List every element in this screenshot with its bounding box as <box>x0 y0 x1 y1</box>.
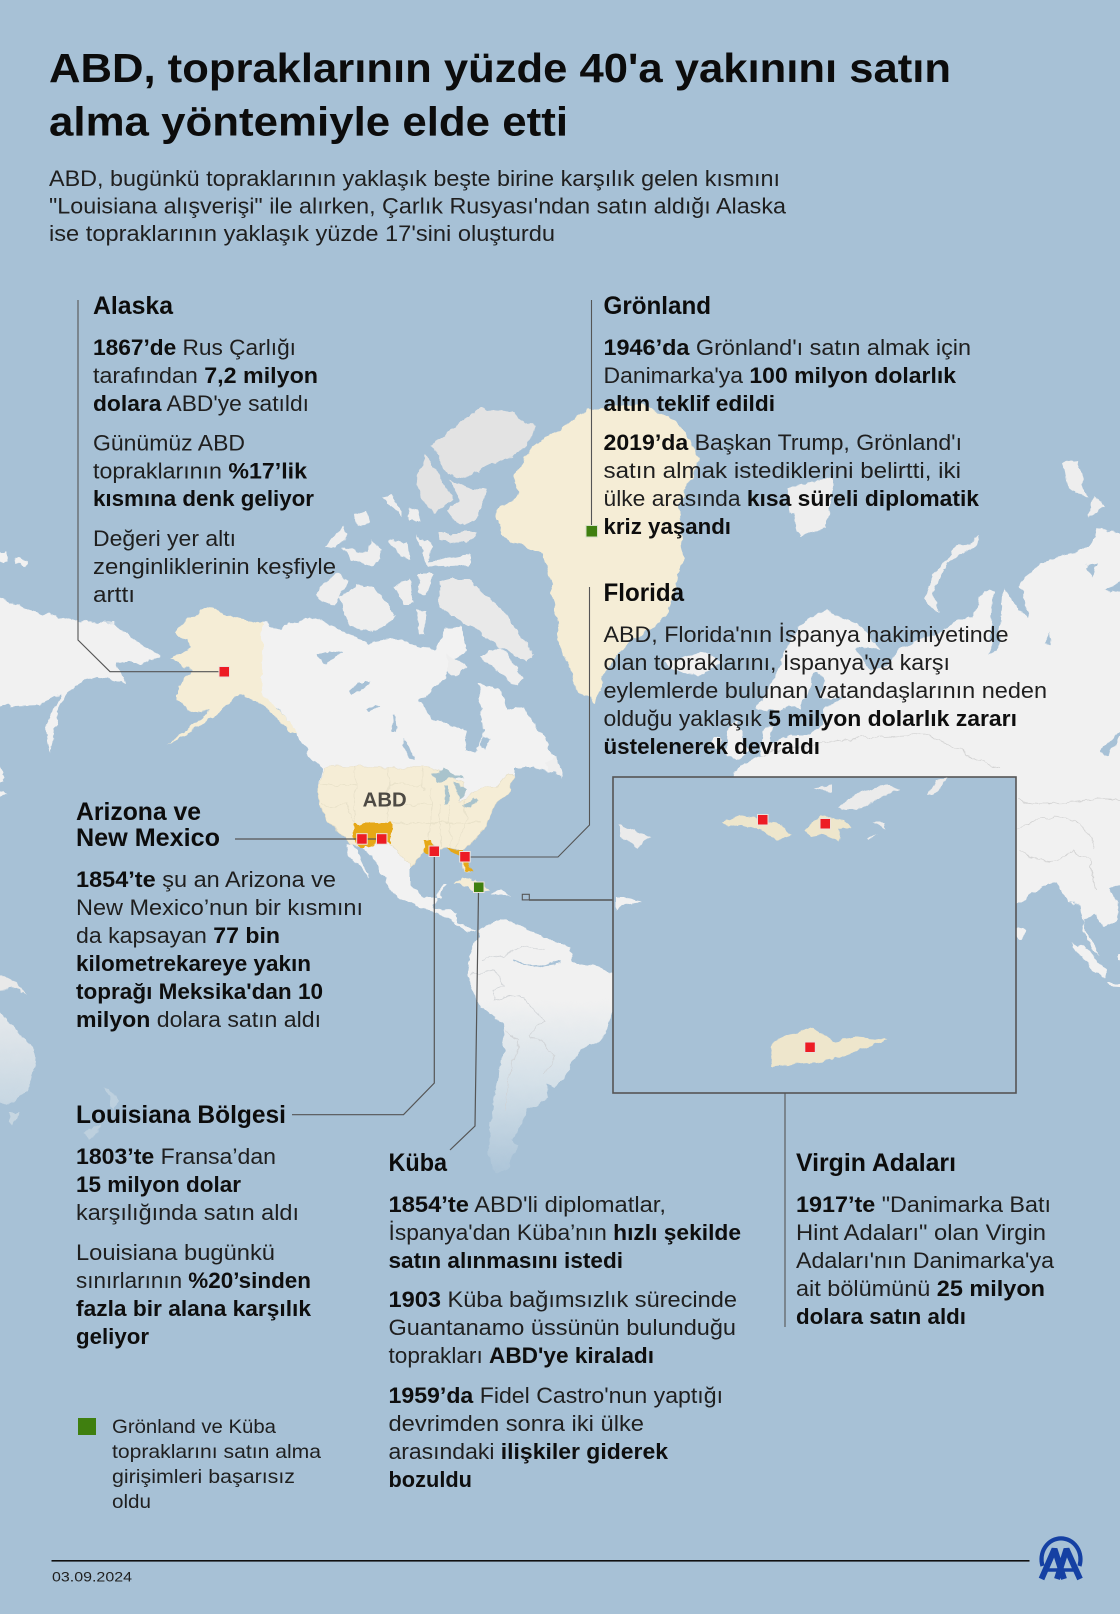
heading: Arizona ve New Mexico: New Mexico <box>76 824 220 852</box>
heading: Arizona ve New Mexico <box>76 798 220 852</box>
text: Küba body: devrimden sonra iki ülke <box>388 1411 644 1436</box>
text: Florida body: eylemlerde bulunan vatandaşlarının neden <box>604 678 1047 703</box>
text: Küba body: toprakları ABD'ye kiraladı <box>388 1343 654 1368</box>
us state borders <box>322 767 480 848</box>
legend text: topraklarını satın alma <box>112 1441 321 1463</box>
inset: puerto rico <box>616 897 642 910</box>
icon: AA logo <box>1042 1538 1080 1579</box>
land: greenland <box>495 405 700 702</box>
text: Küba body: bozuldu <box>388 1467 472 1492</box>
text: Grönland body: Danimarka'ya 100 milyon dolarlık <box>604 363 956 388</box>
marker: alaska <box>219 666 230 677</box>
text: Grönland body: 2019’da Başkan Trump, Grönland'ı <box>604 430 962 455</box>
panel: Grönland <box>604 292 979 539</box>
highlight: louisiana region <box>423 839 434 853</box>
subtitle: ABD, bugünkü topraklarının yaklaşık beşte birine karşılık gelen kısmını <box>49 166 780 191</box>
text: Küba body <box>388 1192 741 1492</box>
text: Louisiana body: 15 milyon dolar <box>76 1172 241 1197</box>
panel: Arizona ve New Mexico <box>76 798 363 1032</box>
inset: nearby islands <box>618 778 947 848</box>
land: australia, new guinea, new zealand <box>0 972 120 1140</box>
footer date: 03.09.2024 <box>52 1568 132 1584</box>
marker: arizona <box>357 834 367 844</box>
heading: Virgin Adaları: Virgin Adaları <box>796 1149 956 1177</box>
text: Virgin Adaları body: Hint Adaları" olan Virgin <box>796 1220 1046 1245</box>
legend swatch: green <box>78 1418 96 1435</box>
text: Louisiana body <box>76 1144 311 1349</box>
text: Küba body: 1854’te ABD'li diplomatlar, <box>388 1192 666 1217</box>
inset frame: virgin islands <box>613 777 1016 1093</box>
text: Virgin Adaları body: dolara satın aldı <box>796 1304 966 1329</box>
land: united states mainland <box>318 767 513 872</box>
panel: Alaska <box>93 292 336 607</box>
marker: saint thomas <box>758 814 768 825</box>
text: Virgin Adaları body: 1917’te "Danimarka Batı <box>796 1192 1051 1217</box>
text: Arizona body: 1854’te şu an Arizona ve <box>76 867 336 892</box>
title: alma yöntemiyle elde etti <box>49 98 568 144</box>
text: Grönland body: ülke arasında kısa süreli diplomatik <box>604 486 979 511</box>
leader lines <box>78 300 785 1327</box>
subtitle: "Louisiana alışverişi" ile alırken, Çarlık Rusyası'ndan satın aldığı Alaska <box>49 194 786 218</box>
heading: Küba: Küba <box>388 1149 448 1177</box>
land: south america <box>467 918 625 1173</box>
land: wrangel and japan <box>0 552 27 802</box>
title <box>49 45 951 144</box>
land: sumatra and sri lanka <box>1017 927 1120 987</box>
highlight: florida <box>446 848 472 872</box>
text: Grönland body: 1946’da Grönland'ı satın almak için <box>604 335 971 360</box>
legend text: oldu <box>112 1491 151 1513</box>
text: Alaska body: Değeri yer altı <box>93 526 236 551</box>
legend text <box>112 1416 321 1513</box>
land: russian far east and kamchatka <box>0 592 160 753</box>
text: Alaska body: kısmına denk geliyor <box>93 486 314 511</box>
text: Alaska body: tarafından 7,2 milyon <box>93 363 318 388</box>
marker: greenland <box>586 526 598 537</box>
text: Louisiana body: Louisiana bugünkü <box>76 1240 275 1265</box>
panel: Florida <box>604 579 1047 759</box>
text: Florida body: olan topraklarını, İspanya'ya karşı <box>604 650 950 675</box>
great lakes <box>432 768 478 808</box>
marker: saint croix <box>805 1042 815 1052</box>
heading: Alaska: Alaska <box>93 292 174 320</box>
text: Grönland body <box>604 335 979 539</box>
map label: ABD: ABD <box>363 790 407 812</box>
land: eurasia <box>725 527 1120 955</box>
siberian water bodies <box>1044 563 1120 755</box>
heading: Arizona ve New Mexico: Arizona ve <box>76 798 201 826</box>
text: Virgin Adaları body <box>796 1192 1054 1329</box>
legend text: girişimleri başarısız <box>112 1466 295 1488</box>
text: Küba body: 1903 Küba bağımsızlık sürecinde <box>388 1287 737 1312</box>
text: Alaska body: arttı <box>93 582 135 607</box>
text: Alaska body: zenginliklerinin keşfiyle <box>93 554 336 579</box>
south america borders <box>470 945 555 1110</box>
inset: saint croix <box>770 1027 888 1067</box>
world map <box>0 405 1120 1173</box>
heading: Grönland: Grönland <box>604 292 711 320</box>
land: alaska <box>167 607 298 745</box>
panel: Küba <box>388 1149 741 1492</box>
text: Alaska body <box>93 335 336 607</box>
map markers <box>219 526 830 1052</box>
land: north america <box>240 617 563 933</box>
text: Grönland body: altın teklif edildi <box>604 391 775 416</box>
text: Virgin Adaları body: Adaları'nın Danimarka'ya <box>796 1248 1054 1273</box>
text: Küba body: Guantanamo üssünün bulunduğu <box>388 1315 736 1340</box>
land: hispaniola <box>490 890 510 897</box>
panel: Virgin Adaları <box>796 1149 1054 1329</box>
marker: saint john <box>820 818 830 829</box>
text: Alaska body: topraklarının %17’lik <box>93 458 307 484</box>
text: Arizona body: toprağı Meksika'dan 10 <box>76 979 323 1004</box>
text: Küba body: arasındaki ilişkiler giderek <box>388 1439 668 1464</box>
marker: florida <box>460 852 470 862</box>
text: Grönland body: satın almak istediklerini belirtti, iki <box>604 458 961 483</box>
arctic islands: svalbard, novaya zemlya, franz josef <box>787 460 1105 613</box>
subtitle <box>49 166 786 246</box>
text: Küba body: İspanya'dan Küba’nın hızlı şekilde <box>388 1220 741 1245</box>
land: cuba <box>455 878 490 892</box>
text: Louisiana body: geliyor <box>76 1324 149 1349</box>
text: Alaska body: 1867’de Rus Çarlığı <box>93 335 296 360</box>
text: Florida body: üstelenerek devraldı <box>604 734 820 759</box>
land: canadian arctic islands <box>315 408 562 778</box>
canadian lakes <box>317 650 490 760</box>
text: Florida body <box>604 622 1047 759</box>
highlight: arizona and new mexico purchase <box>353 823 392 847</box>
marker: louisiana <box>429 846 440 856</box>
text: Louisiana body: fazla bir alana karşılık <box>76 1296 311 1321</box>
inset: saint thomas <box>722 815 792 840</box>
text: Arizona body: kilometrekareye yakın <box>76 951 311 976</box>
text: Arizona body: milyon dolara satın aldı <box>76 1007 321 1032</box>
marker: new mexico <box>376 834 387 844</box>
title: ABD, topraklarının yüzde 40'a yakınını satın <box>49 45 951 91</box>
text: Arizona body: New Mexico’nun bir kısmını <box>76 895 363 920</box>
land: iceland and britain <box>665 652 747 760</box>
text: Küba body: 1959’da Fidel Castro'nun yaptığı <box>388 1383 723 1408</box>
subtitle: ise topraklarının yaklaşık yüzde 17'sini oluşturdu <box>49 221 555 246</box>
asia terrain lines <box>760 735 1120 890</box>
inset: islands <box>616 778 947 1067</box>
river details <box>515 960 560 968</box>
heading: Louisiana Bölgesi: Louisiana Bölgesi <box>76 1101 286 1129</box>
text: Alaska body: dolara ABD'ye satıldı <box>93 391 309 416</box>
land: baja california <box>347 843 370 878</box>
inset: saint john <box>805 815 853 841</box>
legend text: Grönland ve Küba <box>112 1416 276 1438</box>
text: Louisiana body: karşılığında satın aldı <box>76 1200 299 1225</box>
text: Grönland body: kriz yaşandı <box>604 514 731 539</box>
text: Florida body: olduğu yaklaşık 5 milyon dolarlık zararı <box>604 706 1017 731</box>
footer rule <box>52 1560 1030 1562</box>
text: Florida body: ABD, Florida'nın İspanya hakimiyetinde <box>604 622 1008 647</box>
panel: Louisiana Bölgesi <box>76 1101 311 1349</box>
text: Arizona body: da kapsayan 77 bin <box>76 923 280 948</box>
text: Alaska body: Günümüz ABD <box>93 430 245 456</box>
land shapes with organic coastlines <box>0 405 1120 1173</box>
text: Virgin Adaları body: ait bölümünü 25 milyon <box>796 1276 1045 1301</box>
text: Arizona body <box>76 867 363 1032</box>
text: Louisiana body: 1803’te Fransa’dan <box>76 1144 276 1169</box>
marker: cuba <box>474 882 484 892</box>
text: Louisiana body: sınırlarının %20’sinden <box>76 1268 311 1293</box>
heading: Florida: Florida <box>604 579 685 607</box>
text: Küba body: satın alınmasını istedi <box>388 1248 623 1273</box>
legend <box>78 1416 321 1513</box>
